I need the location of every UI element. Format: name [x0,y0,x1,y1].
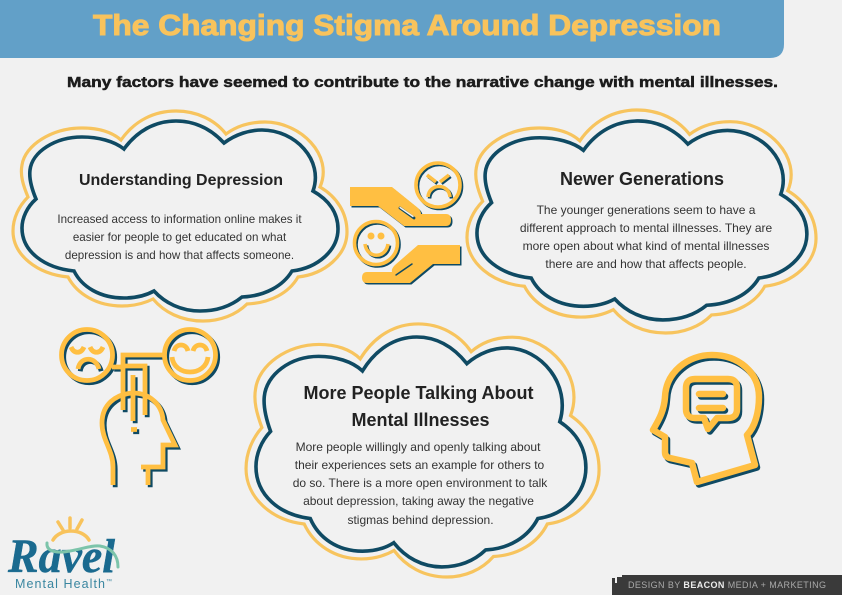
logo wave [47,543,118,567]
body text: more people talking: do so. There is a more open environment to talk [293,476,548,490]
icon: hands exchanging faces [350,163,462,284]
body text: newer generations: The younger generations seem to have a [537,203,756,217]
logo tagline: ™ [106,578,112,585]
icon: bottom hand [362,245,462,284]
title: The Changing Stigma Around Depression [93,10,721,42]
icon: happy face [354,222,399,266]
header banner [0,0,784,58]
heading: more people talking: More People Talking About [303,383,534,403]
heading: newer generations: Newer Generations [560,169,724,189]
cloud outline: newer generations [467,110,816,333]
body text: understanding depression: depression is and how that affects someone. [65,249,294,262]
body text: understanding depression: easier for people to get educated on what [73,231,287,244]
panel: more people talking [246,324,599,577]
body text: newer generations: there are and how that affects people. [545,257,747,271]
body text: more people talking: their experiences sets an example for others to [295,458,545,472]
body text: understanding depression: Increased access to information online makes it [57,213,302,226]
logo sun [53,518,89,540]
logo wordmark: Ravel [7,530,116,583]
icon: top hand [350,187,452,228]
footer credit text: DESIGN BY BEACON MEDIA + MARKETING [628,580,826,590]
heading: more people talking: Mental Illnesses [351,410,490,430]
body text: more people talking: More people willingly and openly talking about [296,440,541,454]
panel: newer generations [467,110,816,333]
icon: head with sad and happy faces [62,330,218,487]
subtitle: Many factors have seemed to contribute to the narrative change with mental illnesses. [67,74,778,91]
body text: more people talking: stigmas behind depression. [347,513,494,527]
footer credit bar [612,575,842,595]
body text: more people talking: about depression, taking away the negative [303,494,534,508]
body text: newer generations: different approach to mental illnesses. They are [520,221,773,235]
cloud outline: more people talking [246,324,599,577]
heading: understanding depression: Understanding Depression [79,172,283,189]
icon: head with speech bubble [653,355,761,484]
logo tagline: Mental Health [15,577,105,591]
body text: newer generations: more open about what kind of mental illnesses [523,239,769,253]
logo: ravel mental health [7,518,118,591]
icon: sad face [416,163,462,208]
cloud outline: understanding depression [13,111,347,321]
panel: understanding depression [13,111,347,321]
